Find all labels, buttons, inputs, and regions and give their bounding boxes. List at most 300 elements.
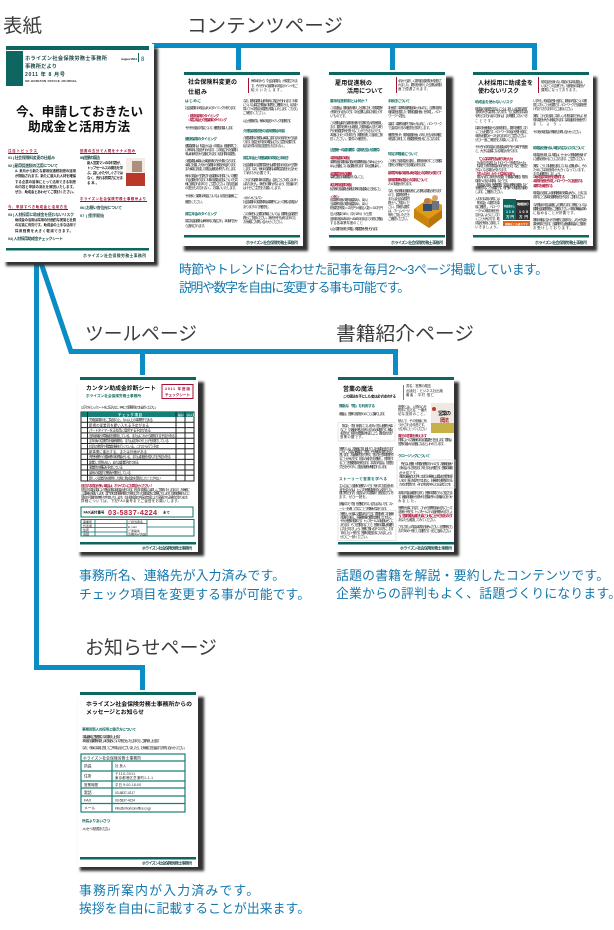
book review body: 主人公はごく普通の営業マンです。売れずに悩む彼があ: [339, 483, 395, 488]
book review body: クロージングについて: [398, 453, 430, 458]
article body: ので、顧問税理士: [388, 192, 411, 197]
article body: また65歳に到達した場合は徴収が終了いたします。: [185, 166, 238, 171]
book review body: [338, 403, 455, 540]
article body: 40歳に到達した月から保険料の徴収が始まります。: [185, 162, 238, 167]
article body: 果が期待できます。当事務所では各種助成金のご相談を: [533, 221, 587, 226]
cover table of contents: 助成金の活用は採用の計画的な実施と社員: [15, 217, 77, 222]
article body: 控除との併用ができる場合があります。: [388, 162, 428, 167]
office info table: FAX: [84, 798, 92, 802]
office info table: メール: [84, 806, 96, 810]
cover title: [16, 104, 143, 134]
badge: 2011 check sheet: チェックシート: [165, 392, 190, 397]
article body: [330, 78, 443, 231]
article body: 法人税額の10％（中小20％）が上限: [330, 211, 373, 216]
book review body: 相手に伝える、一番大: [398, 407, 428, 412]
checklist table: 新規の従業員を雇い入れる予定がある: [89, 422, 149, 427]
article body: します。ご確認ください。: [475, 189, 505, 194]
notice message: 平素は格別のご高配を賜り、厚く御礼申し上げます。: [82, 734, 122, 739]
article body: 助成金を使わない場合の主なリスクについて: [533, 145, 585, 150]
book review body: 無駄な「間」を利用する: [339, 403, 375, 408]
notice closing: メッセージをお書きください。: [82, 826, 112, 831]
book review body: 質問によってお客様の本当の要望を引き出します。質問は: [398, 437, 453, 442]
article body: ぜひ一度ご確認をお願いします。: [475, 137, 520, 142]
article body: 社会保険料の変更時期は事業所によって異なる場合が: [243, 199, 299, 204]
caption: tool page: チェック項目を変更する事が可能です。: [79, 587, 310, 602]
cover table of contents: 01 | 社会保険料変更の仕組み: [8, 155, 55, 160]
cover footer: ホライズン社会保険労務士事務所: [83, 253, 146, 258]
article body: 「助成金の活用」「就業規則」「賃金台帳等の整備」など: [475, 182, 529, 187]
cover table of contents: A. 来月から新たな雇用促進税制度の運用: [15, 168, 77, 173]
article body: 税額控除額 ＝ 20万円 × 増加人数 ＝ 100万円: [330, 205, 384, 210]
checklist notes: [81, 483, 191, 503]
article body: はじめに: [185, 98, 201, 103]
heading: cover: 表紙: [3, 15, 42, 37]
article body: 厚生年金保険料は毎年9月に改定され、10月納付分か: [185, 218, 239, 223]
page: tool checklist: [78, 375, 204, 556]
cover title: 今、申請しておきたい: [16, 104, 143, 119]
caption: notice page: 事務所案内が入力済みです。: [79, 883, 259, 898]
book review body: 決めるように導きます。押し付けは不要です。信頼の構築: [399, 465, 454, 470]
office info table: 所長: [84, 764, 92, 768]
article footer: ホライズン社会保険労務士事務所: [246, 240, 298, 245]
notice message: なお、今後の採用に関してご不明な点がございましたら、お気軽に担当者までお問い合わせください。: [82, 745, 187, 750]
article body: 1. 計画書：事業年度開始後2ヶ月以内に、目標の雇用: [388, 105, 442, 110]
article body: 率は4月納付分から適用されます。給与計算の変更を。: [185, 151, 238, 156]
checklist notes: 該当する項目が多い場合は、ホライズンにお問合せください！: [81, 483, 153, 488]
article title: [188, 78, 237, 96]
caption: tool page: 事務所名、連絡先が入力済みです。: [79, 568, 285, 583]
article body: 前事業年度の雇用者数 20人（10人）: [330, 197, 370, 202]
masthead text: 2011 年 8 月号: [25, 70, 65, 78]
article body: 5人以上増加している必要があります（中小企業は2人）。: [330, 163, 383, 168]
article body: は十分ご注意をお願いします。: [243, 185, 283, 190]
article body: 事業主都合の離職者がいないこと。: [330, 174, 366, 179]
masthead text: [25, 53, 145, 83]
article body: 毎月の賃金から控除される保険料の計算について確認: [185, 173, 239, 178]
notice title: ホライズン社会保険労務士事務所からの: [86, 700, 192, 708]
article body: 算ソフトの設定の変更をお願いいたします。こちらも: [243, 106, 298, 111]
article body: ＜ポイントについて＞: [243, 195, 264, 200]
book review body: ることが大切です。相手の気持ちを理解し、質問をす: [339, 456, 395, 461]
book review body: 営業を仕事にする方、これから営業を始める方にとって: [398, 505, 453, 510]
caption: book page: 企業からの評判もよく、話題づくりになります。: [336, 586, 614, 601]
article body: 確認を受けた「雇用促進計画」の写しを法人税の確定: [388, 132, 443, 137]
book review body: 商談の最後のひと押しで迷うお客様には魔法の質問を使: [399, 474, 454, 478]
article body: 助成金の活用による経費軽減の効果は大きく、上手に活: [533, 190, 588, 195]
book details: [406, 383, 454, 433]
page: employment tax article: [326, 70, 453, 251]
page: tool checklist: 以下のチェックシートをご記入の上、FAXにて事務所までお送りください。: [81, 404, 158, 410]
connector lines: [36, 45, 534, 690]
article body: 2. 雇用計画を作成しハローワークに相談する: [533, 178, 583, 183]
article body: ましょう。: [533, 121, 563, 126]
cover table of contents: 読書の五分で人間をナナメ読み: [80, 148, 136, 153]
badge: 2011 check sheet: 2011 年度版: [165, 386, 190, 391]
office info table: info@srhorizonoffice.co.jp: [115, 806, 151, 810]
article body: 厚生年金のタイミング: [185, 211, 217, 216]
article title: 仕組み: [188, 88, 207, 96]
article body: は、ホームページ: [388, 208, 411, 213]
book review body: 式で分かりやすく、魔法の秘訣が解説されています。: [339, 464, 389, 469]
article body: ます。要件を満たせば増加した雇用者1人当たり20万: [330, 124, 384, 129]
book review body: 彼に教えられた、魔法のような言葉が、彼を変えていき: [339, 490, 394, 495]
article body: ワークへ提出。: [388, 113, 408, 118]
book review body: 営業の鍵です。: [340, 434, 365, 439]
article body: が認められるものです。中小企業には特に利用しやす: [330, 109, 384, 114]
contact form table: ご連絡先: [128, 528, 140, 533]
article body: [185, 78, 299, 228]
article body: なお、雇用保険料は例年4月に改定が行われます。料率: [243, 98, 299, 103]
book review body: ぜひ手にとってください: [398, 426, 428, 431]
article body: ご確認ください。: [388, 216, 410, 221]
article body: 等をご覧いただき: [388, 212, 410, 217]
article body: 「雇入れ前に手続きが必要」「対象者の確認」「雇用: [475, 174, 528, 179]
page: recruitment risk article: [471, 70, 597, 251]
article body: 当事業年度の雇用者数 25人（12人）: [330, 201, 370, 206]
article body: 介護保険料の徴収は40歳に達する月の前月分から始ま: [243, 135, 298, 140]
cover table of contents: 06 | お願い各位宛について: [80, 205, 122, 210]
article body: 以上の要件を満たす場合、税額控除が受けられます。: [330, 226, 380, 231]
graphic: subsidy amount panel: 万円: [506, 215, 514, 219]
cover table of contents: ホライズン社会保険労務士事務所より: [80, 196, 146, 201]
office info table: 社 良人: [115, 763, 127, 768]
article body: 厚生年金と介護保険の徴収と手続き: [243, 155, 289, 160]
book review body: ぜひご一読ください。: [340, 534, 370, 539]
article body: 健康保険のタイミング: [185, 136, 217, 141]
checklist table: はい: [178, 413, 184, 417]
article body: 課題になっております。: [541, 87, 579, 92]
article body: ＜例＞: [330, 194, 341, 199]
notice closing: 所長よりあいさつ: [82, 818, 110, 823]
article title: 雇用促進税の: [335, 79, 372, 87]
page: book review: [335, 375, 459, 556]
book review body: 著者は、営業の技術を5つのことに集約します。: [339, 411, 387, 416]
page: cover: [1, 44, 158, 266]
graphic: subsidy amount panel: 助成金なし: [504, 204, 515, 208]
article body: の提出もお忘れなく、お願いいたします。: [185, 185, 238, 190]
book review body: ための質問です。それが本書の中心となる考えです。: [399, 482, 453, 486]
article body: 3. 給与等支給額の増加: [330, 182, 353, 187]
article body: 増加数を記載した「雇用促進計画」を作成し、ハロー: [388, 109, 443, 114]
cover table of contents: なく、売れる質問力にせま: [87, 175, 123, 180]
fax number box: まで: [163, 510, 170, 514]
article body: 認しておくことが必要です。ハローワークでも相談を受: [533, 102, 588, 107]
graphic: subsidy amount panel: [503, 199, 530, 226]
article body: それぞれの助成金の支給額は30万円から100万円程度: [475, 144, 529, 149]
checklist title: ホライズン社会保険労務士事務所: [86, 393, 141, 398]
article body: いきましょう。: [475, 224, 500, 229]
notice title: メッセージとお知らせ: [86, 708, 144, 716]
article body: を確認することが重要です。専門家への相談をお勧め: [475, 185, 529, 190]
book review body: あります。そこを意識することで、営業の成果は飛躍的: [340, 522, 395, 527]
article body: いものです。: [330, 113, 348, 118]
article body: 申請が必要なケースもありますのでご注意ください。: [475, 133, 528, 138]
office info table: 営業時間: [84, 782, 98, 787]
cover table of contents: 注目トピックス: [8, 148, 38, 153]
book review body: 言います。お客様が自分で考え、答えを出す時間を作: [339, 452, 395, 457]
caption: contents pages: [179, 262, 548, 295]
article body: ために採用経費が大きくなっています。: [533, 167, 587, 172]
checklist notes: ご連絡をお願いします。専門の社会保険労務士が貴社に合った助成金をご提案いたします。診断結果をもとに: [81, 490, 191, 496]
checklist table: [81, 412, 195, 481]
article body: ります。誕生日が月初の場合はさらに注意が必要です。: [243, 139, 298, 144]
article body: ・健康保険のタイミング: [187, 113, 220, 118]
article body: 紹介いたします。: [251, 87, 284, 92]
article body: なお受給の可否は制度により異なります。詳細については: [533, 202, 588, 207]
office info table: ホライズン社会保険労務士事務所: [83, 756, 141, 760]
cover table of contents: 今、申請すべき助成金と活用方法: [8, 204, 68, 209]
article title: 社会保険料変更の: [188, 78, 237, 86]
book title: 営業の魔法: [343, 385, 373, 393]
article body: この他にも助成金を活用し、雇用を増やすことで税額: [388, 158, 443, 163]
cover table of contents: の定着に有効です。助成金の上手な活用で: [15, 222, 77, 227]
book review body: が大切です。: [399, 470, 419, 475]
article title: 使わないリスク: [478, 87, 519, 95]
book review body: ます。ぜひ一読を。: [339, 494, 369, 499]
cover table of contents: 07 | 接拶開始: [80, 213, 104, 218]
book review body: 営業マンは、お客様に話し続けてしまう傾向があります: [339, 446, 395, 451]
cover table of contents: 採用経費を大きく軽減できます。: [15, 228, 73, 233]
checklist table: いいえ: [186, 413, 195, 417]
article body: 助成金の活用を知らないことは、新しい人材を採用す: [475, 106, 529, 111]
masthead text: SR-HORIZON OFFICE JOURNAL: [25, 79, 77, 83]
article body: 採用の計画段階から活用を検討し、要件を確認してお: [475, 125, 529, 130]
cover table of contents: る本。: [87, 180, 99, 185]
caption: contents pages: 説明や数字を自由に変更する事も可能です。: [179, 280, 410, 295]
article body: 適用年度 2012年4月〜2014年3月末までの間に開始: [330, 216, 384, 221]
book review body: ストーリーで営業を学べる: [339, 476, 387, 481]
article body: 事業年度の雇用者の数が前事業年度より10％以上かつ: [330, 159, 384, 164]
book review body: う。営業の魔法は誰でも身につけることができるものです: [398, 513, 454, 518]
article body: 人材の採用の際には: [475, 196, 501, 201]
article body: ご確認ください。: [243, 110, 268, 115]
article body: 手続きについて: [388, 98, 410, 103]
article body: 実際、こうした制度を活用していない企業は多く、その: [533, 163, 588, 168]
article body: 1. 雇用者数の増加: [330, 155, 351, 160]
cover table of contents: 05 | 営業の魔法: [80, 155, 100, 160]
checklist table: 定年後の従業員を継続雇用、または定年の引上げを検討している: [89, 438, 169, 443]
article body: いまどこの企業でも、経費面の負担が: [541, 83, 586, 88]
cover table of contents: [8, 148, 147, 241]
article body: 1. 助成金の制度を理解する: [533, 174, 565, 179]
book review body: 魔法の言葉を教えます: [398, 433, 428, 438]
checklist title: カンタン助成金診断シート: [86, 384, 156, 392]
article body: 2. 前事業年度の離職: [330, 171, 353, 176]
book review body: ることで信頼関係を築きます。本書の内容は、物語形: [339, 460, 395, 465]
article body: に経費が掛かることになります。ご注意ください。: [533, 156, 587, 161]
fax number box: FAX送付番号: [84, 510, 105, 514]
book review body: 本書の内容は実践的であり、営業の現場ですぐに役立ちま: [398, 490, 453, 495]
article body: 務士にご相談ください。手続き代行も承りますので、: [243, 215, 298, 220]
book review body: それが営業の基本です。トップセールスの秘訣はそこに: [340, 518, 395, 523]
article body: くことが大切です。助: [475, 216, 501, 221]
article body: 確認ください。: [185, 199, 205, 204]
article body: で達成状況の確認を請求します。: [388, 125, 432, 130]
caption: contents pages: 時節やトレンドに合わせた記事を毎月2〜3ページ掲載しています。: [179, 262, 548, 277]
article body: 健康保険料は「協会けんぽ」の場合は、都道府県ごと: [185, 143, 238, 148]
contact form table: 住所: [83, 527, 89, 532]
fax number box: [81, 507, 193, 517]
article body: 前に確認し、ハローワ: [475, 204, 500, 209]
article title: 人材採用に助成金を: [478, 79, 533, 87]
caption: tool page: [79, 568, 310, 602]
masthead text: 事務所だより: [25, 62, 57, 70]
article body: 様に適用されますので、ご注意ください。賞与支払届: [185, 181, 239, 186]
book details: 営業の: [438, 410, 451, 417]
heading: contents pages: コンテンツページ: [187, 16, 343, 37]
book review body: す。著者の経験から導かれた言葉が多くの読者の心をつか: [398, 494, 454, 499]
article footer: ホライズン社会保険労務士事務所: [391, 240, 443, 245]
heading: tool page: ツールページ: [85, 324, 197, 345]
notice message: 事務所新人の採用と働き方について: [82, 726, 136, 732]
article body: 介護保険制度の適用開始年齢: [243, 128, 285, 133]
article body: 助成金を使わないリスク: [475, 99, 513, 104]
article body: その他の助成金の情報もお問い合わせください。: [533, 129, 583, 134]
book review body: を恐れず、相手の言葉を待ちましょう。間の取り方が: [340, 430, 394, 436]
cover table of contents: 03 | 人材採用に助成金を使わないリスク: [8, 212, 74, 217]
article body: 「人の紹介で採用した」「ハローワークを通さなかった」: [475, 160, 528, 165]
article body: 「こんな採用方法はありませんか」: [477, 156, 515, 161]
article body: 雇用促進税制とは何か？: [330, 98, 368, 103]
heading: notice page: お知らせページ: [85, 637, 217, 659]
checklist notes: 詳細については、下記FAX番号までご返信をお願いします。: [81, 498, 181, 503]
article body: 法律第一の適用要件（適用を受ける要件）: [330, 147, 382, 152]
masthead text: ホライズン社会保険労務士事務所: [25, 54, 108, 62]
article body: なお、他の税制の適用状況により異なる場合があります: [388, 188, 443, 193]
article body: くことが必要です。ハローワークの紹介を受ける前に: [475, 129, 529, 134]
book review body: さらに詳しい内容は本書をお読みください。社員教育にも: [398, 524, 453, 529]
graphic: subsidy amount panel: 105: [519, 210, 528, 214]
book details: 出版社：ビジネス社出版: [406, 388, 444, 393]
page: insurance article: [180, 70, 308, 251]
notice title: [86, 700, 192, 716]
office info table: 〒110-0011: [115, 772, 135, 776]
office info table: 03-5837-4224: [115, 798, 135, 802]
article body: に始めることが肝要です。: [533, 210, 577, 215]
article body: ら適用されます。: [185, 223, 207, 228]
article body: て納付が必要です。: [243, 170, 273, 175]
article body: 給与計算の設定変更をお忘れなく。: [243, 143, 287, 148]
book details: 書名：営業の魔法: [406, 383, 432, 388]
book review body: 営業の最大の武器になるといわれています。: [398, 441, 446, 446]
article body: 成金を有効に活用して: [475, 220, 500, 225]
book review body: なこと！お客様が答えを考えるための時間です。無駄: [340, 427, 394, 432]
notice closing: [82, 818, 112, 831]
office info table: 住所: [84, 774, 92, 778]
article body: 3. 要件を確認する: [533, 183, 553, 188]
book review body: 営業という仕事に必要な考え方です。質問を通じてお客様: [340, 511, 395, 516]
article body: 申告書に添付して、税額控除を受けることになります。: [388, 136, 442, 141]
masthead text: August 2011: [121, 57, 137, 61]
notice message: [82, 726, 187, 750]
article title: [478, 79, 533, 95]
article body: 用することで採用の選択肢が広がります。ご検討ください。: [533, 194, 587, 199]
article body: 以上が基本的な、毎年の改定タイミングの説明です。: [243, 118, 293, 123]
checklist table: パートタイマーを正社員に登用する予定がある: [89, 428, 151, 433]
article title: 活用について: [347, 87, 383, 95]
article body: 2. 達成：事業年度終了後2ヶ月以内に、ハローワーク: [388, 121, 442, 126]
article body: 「採用した後で助成金の存在を知った」など、受給で: [475, 163, 529, 168]
article body: け付けておりますのでご活用ください。: [533, 106, 575, 111]
article body: 面で優遇されます。: [398, 86, 430, 91]
fax number box: 03-5837-4224: [108, 508, 157, 517]
article body: ークへの申請手続きを: [475, 208, 500, 213]
checklist notes: 該当する項目の数により受給可能な助成金があります。該当する場合には詳しくご説明いたしますので、お気軽に: [81, 487, 191, 492]
contact form table: 事業所: [83, 519, 92, 524]
book review body: づかされる作品です。: [398, 422, 427, 427]
article body: 忘れないようにしてお: [475, 212, 501, 217]
article body: す。それぞれの保険料の改定ポイントをご: [251, 83, 299, 88]
article body: 4月から新しく雇用促進税制が創設さ: [398, 78, 442, 83]
article body: する各事業年度のこと: [330, 220, 363, 225]
article body: 2年度にわたって利用でき、期間を通して活用をご検: [330, 132, 384, 137]
checklist table: 景気の変動で業績が悪化している: [89, 470, 131, 475]
article title: [335, 79, 383, 95]
article body: 務士へご相談くだ: [388, 200, 411, 205]
graphic: subsidy amount panel: 110: [506, 210, 514, 214]
contact form table: 代表者: [83, 523, 92, 528]
article body: と、大きな金額になる場合があります。: [475, 148, 520, 153]
article body: お気軽にお問い合わせください。: [243, 219, 285, 224]
article body: ばなりません。手続きの漏れがないよう、担当者の方: [243, 181, 299, 186]
article body: 保険への加入時期」などです。: [475, 178, 510, 183]
cover table of contents: の内容と申請の流れを解説いたします。: [15, 184, 76, 189]
article body: 雇用の増加に合わせて計画的に活用すると、より大きな効: [533, 217, 588, 222]
article body: お受けしております。: [533, 225, 573, 230]
cover table of contents: 04 | 人材採用助成金チェックシート: [8, 236, 63, 241]
checklist table: 新事業に進出する、または計画がある: [89, 449, 147, 454]
graphic: subsidy amount panel: 助成金あり: [517, 201, 529, 206]
article body: 助成金を使わない場合の採用活動は、: [541, 79, 585, 84]
article body: 円の税額控除を受けることができるものです。: [330, 128, 383, 133]
checklist table: 社員の教育や職業訓練を行っている、これから行う予定: [89, 444, 160, 448]
book review body: すめしたい一冊です。営業の魔法を手に入れましょう。: [340, 530, 394, 535]
notice message: 本年度の当事務所の新しい取り組みについてお知らせいたしますので、ご案内申し上げます。: [82, 738, 161, 743]
book review body: います。答えを促すのではなく、お客様の決断を助ける: [399, 478, 453, 482]
graphic: subsidy amount panel: 万円: [519, 215, 528, 219]
article body: 費の負担が大きく軽減されます。採用活動の計画を作り: [533, 117, 587, 122]
checklist table: 新しく従業員を雇用した際に助成金を受給したことがない: [89, 476, 162, 480]
illustration: man at desk: [414, 195, 442, 228]
book review body: 必読の一冊です。トップセールスへの道が開かれるでしょ: [398, 509, 453, 514]
article body: 助成金を利用しない場合は、せっかくの受給権を使わず: [533, 152, 588, 157]
article body: 介護保険は40歳以上65歳未満の方が対象となります。: [185, 158, 238, 163]
article body: を考えておられるのであれば、まず確認しておくべき: [475, 113, 528, 118]
cover table of contents: する企業の皆様にとって活用できる制度: [15, 179, 77, 184]
article body: ・厚生年金と介護保険のタイミング: [187, 117, 228, 122]
article body: ありますので確認を。: [243, 204, 271, 209]
article body: る際の大きな損失になります。もし従業員の採用: [475, 109, 528, 114]
heading: book page: 書籍紹介ページ: [336, 323, 474, 345]
article body: この手続きに必要な情報については、顧問社会保険労: [243, 211, 299, 216]
article body: 給与等の支給額が比較給与等の支給額以上であること。: [330, 186, 383, 191]
article body: その他の、保険料の改定については、給与担当者様にご: [185, 193, 239, 198]
cover table of contents: ぶ。話しかたやしぐさでは: [87, 170, 124, 175]
page: notice: [78, 690, 204, 871]
article body: 討ください。要件の確認を。: [330, 136, 370, 141]
book page footer: ホライズン社会保険労務士事務所: [400, 546, 452, 550]
cover title: 助成金と活用方法: [28, 119, 130, 134]
office info table: 03-5837-4217: [115, 791, 135, 795]
article footer: ホライズン社会保険労務士事務所: [535, 240, 587, 245]
book details: 魔法: [440, 417, 449, 424]
article body: する必要があります。料率の変更は賞与についても同: [185, 177, 239, 182]
book review body: 「あなた、「間」を味方にしていますか。間」は営業で大事: [340, 423, 394, 428]
checklist table: チェック項目: [118, 412, 142, 417]
book details: 著者：中村 信仁: [406, 392, 435, 397]
caption: book page: 話題の書籍を解説・要約したコンテンツです。: [336, 568, 609, 583]
office info table: 電話: [84, 790, 92, 795]
